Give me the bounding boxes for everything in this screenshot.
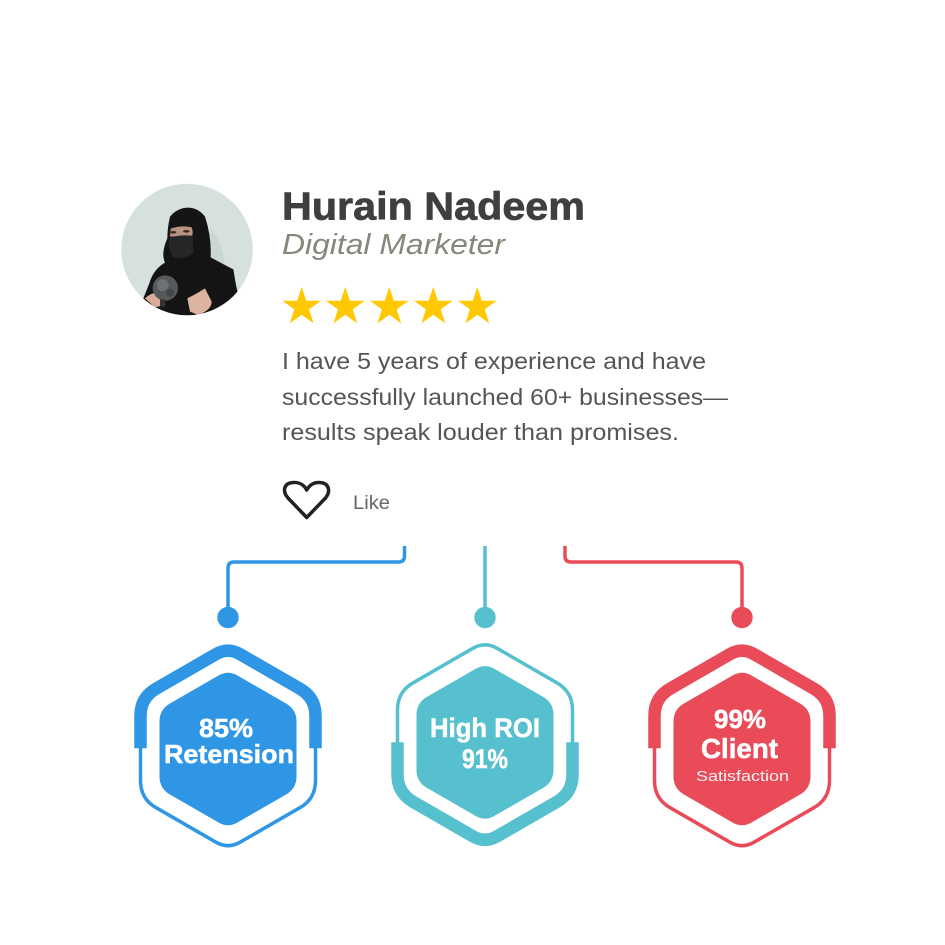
badge: 99% client satisfaction xyxy=(654,651,830,846)
badge: high roi 91% xyxy=(398,645,572,840)
red badge text: Satisfaction xyxy=(696,768,789,785)
blue hexagon fill xyxy=(160,673,296,825)
testimonial text: successfully launched 60+ businesses— xyxy=(282,384,728,410)
like label: Like xyxy=(353,492,390,514)
red badge text: Client xyxy=(701,733,778,764)
name heading: Hurain Nadeem xyxy=(282,186,585,228)
five star rating xyxy=(282,287,497,323)
testimonial text xyxy=(282,348,728,445)
red badge text: 99% xyxy=(714,704,766,734)
teal badge text: High ROI xyxy=(430,713,540,743)
connector: blue xyxy=(217,546,404,628)
testimonial text: results speak louder than promises. xyxy=(282,419,679,445)
teal badge text: 91% xyxy=(462,744,508,774)
blue hexagon frame xyxy=(140,651,316,846)
testimonial text: I have 5 years of experience and have xyxy=(282,348,706,374)
red hexagon frame xyxy=(654,651,830,846)
job title: Digital Marketer xyxy=(282,229,506,261)
infographic canvas xyxy=(121,184,836,848)
connector: teal xyxy=(474,546,496,628)
blue badge text: 85% xyxy=(199,713,253,743)
blue badge text xyxy=(164,713,294,769)
red badge text xyxy=(696,704,789,785)
badge: 85% retension xyxy=(140,651,316,846)
teal hexagon frame xyxy=(398,645,572,840)
profile photo xyxy=(120,183,254,318)
red hexagon fill xyxy=(674,673,810,825)
blue badge text: Retension xyxy=(164,739,294,769)
teal hexagon fill xyxy=(416,666,554,819)
teal badge text xyxy=(430,713,540,774)
icon: heart xyxy=(285,482,329,518)
connector: red xyxy=(565,546,753,628)
